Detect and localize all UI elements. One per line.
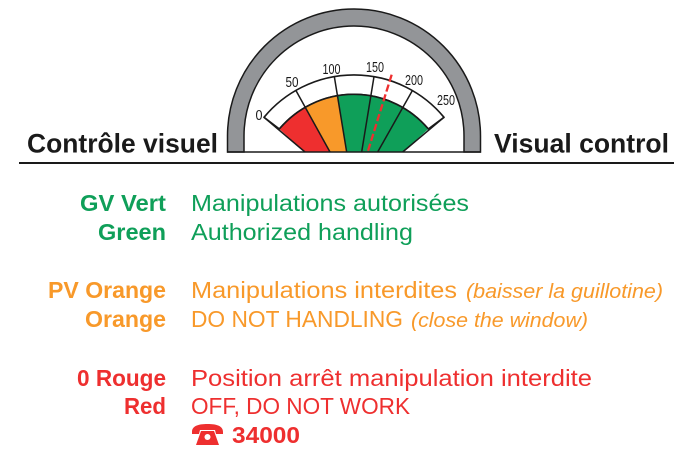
orange block [48, 277, 663, 332]
text: Manipulations interdites: Manipulations interdites [191, 277, 457, 303]
tick lines [264, 77, 444, 152]
gauge [227, 9, 481, 152]
red block [77, 365, 592, 448]
scale labels: 250 [437, 93, 455, 109]
heading: French: Contrôle visuel [27, 128, 218, 158]
text: OFF, DO NOT WORK: OFF, DO NOT WORK [191, 393, 411, 419]
label: 0 Rouge: 0 Rouge [77, 365, 166, 391]
icon: telephone [192, 424, 223, 445]
text: Position arrêt manipulation interdite: Position arrêt manipulation interdite [191, 365, 592, 391]
scale labels: 150 [366, 60, 384, 76]
scale band [264, 75, 444, 129]
text: DO NOT HANDLING: DO NOT HANDLING [191, 306, 403, 332]
scale labels: 200 [405, 73, 423, 89]
divider [19, 162, 674, 164]
label: Red: Red [124, 393, 166, 419]
label: PV Orange: PV Orange [48, 277, 166, 303]
base line [227, 151, 481, 153]
green zone [337, 94, 428, 152]
scale labels [256, 60, 455, 124]
scale labels: 100 [322, 62, 340, 78]
text: 34000: 34000 [232, 422, 300, 448]
text: close the window: (close the window) [411, 310, 588, 332]
label: GV Vert: GV Vert [80, 190, 166, 216]
green block [80, 190, 469, 245]
heading: English: Visual control [494, 128, 669, 158]
zone outline [279, 94, 428, 129]
needle [368, 75, 392, 152]
red zone [279, 107, 330, 152]
orange zone [306, 96, 347, 152]
text: Manipulations autorisées: Manipulations autorisées [191, 190, 469, 216]
scale labels: 0 [256, 108, 262, 124]
scale labels: 50 [286, 75, 298, 91]
gauge housing [228, 9, 480, 152]
text: Authorized handling: Authorized handling [191, 219, 413, 245]
label: Green: Green [98, 219, 166, 245]
label: Orange: Orange [85, 306, 166, 332]
text: baisser la guillotine: (baisser la guillotine) [466, 281, 663, 303]
gauge dial [264, 75, 444, 152]
